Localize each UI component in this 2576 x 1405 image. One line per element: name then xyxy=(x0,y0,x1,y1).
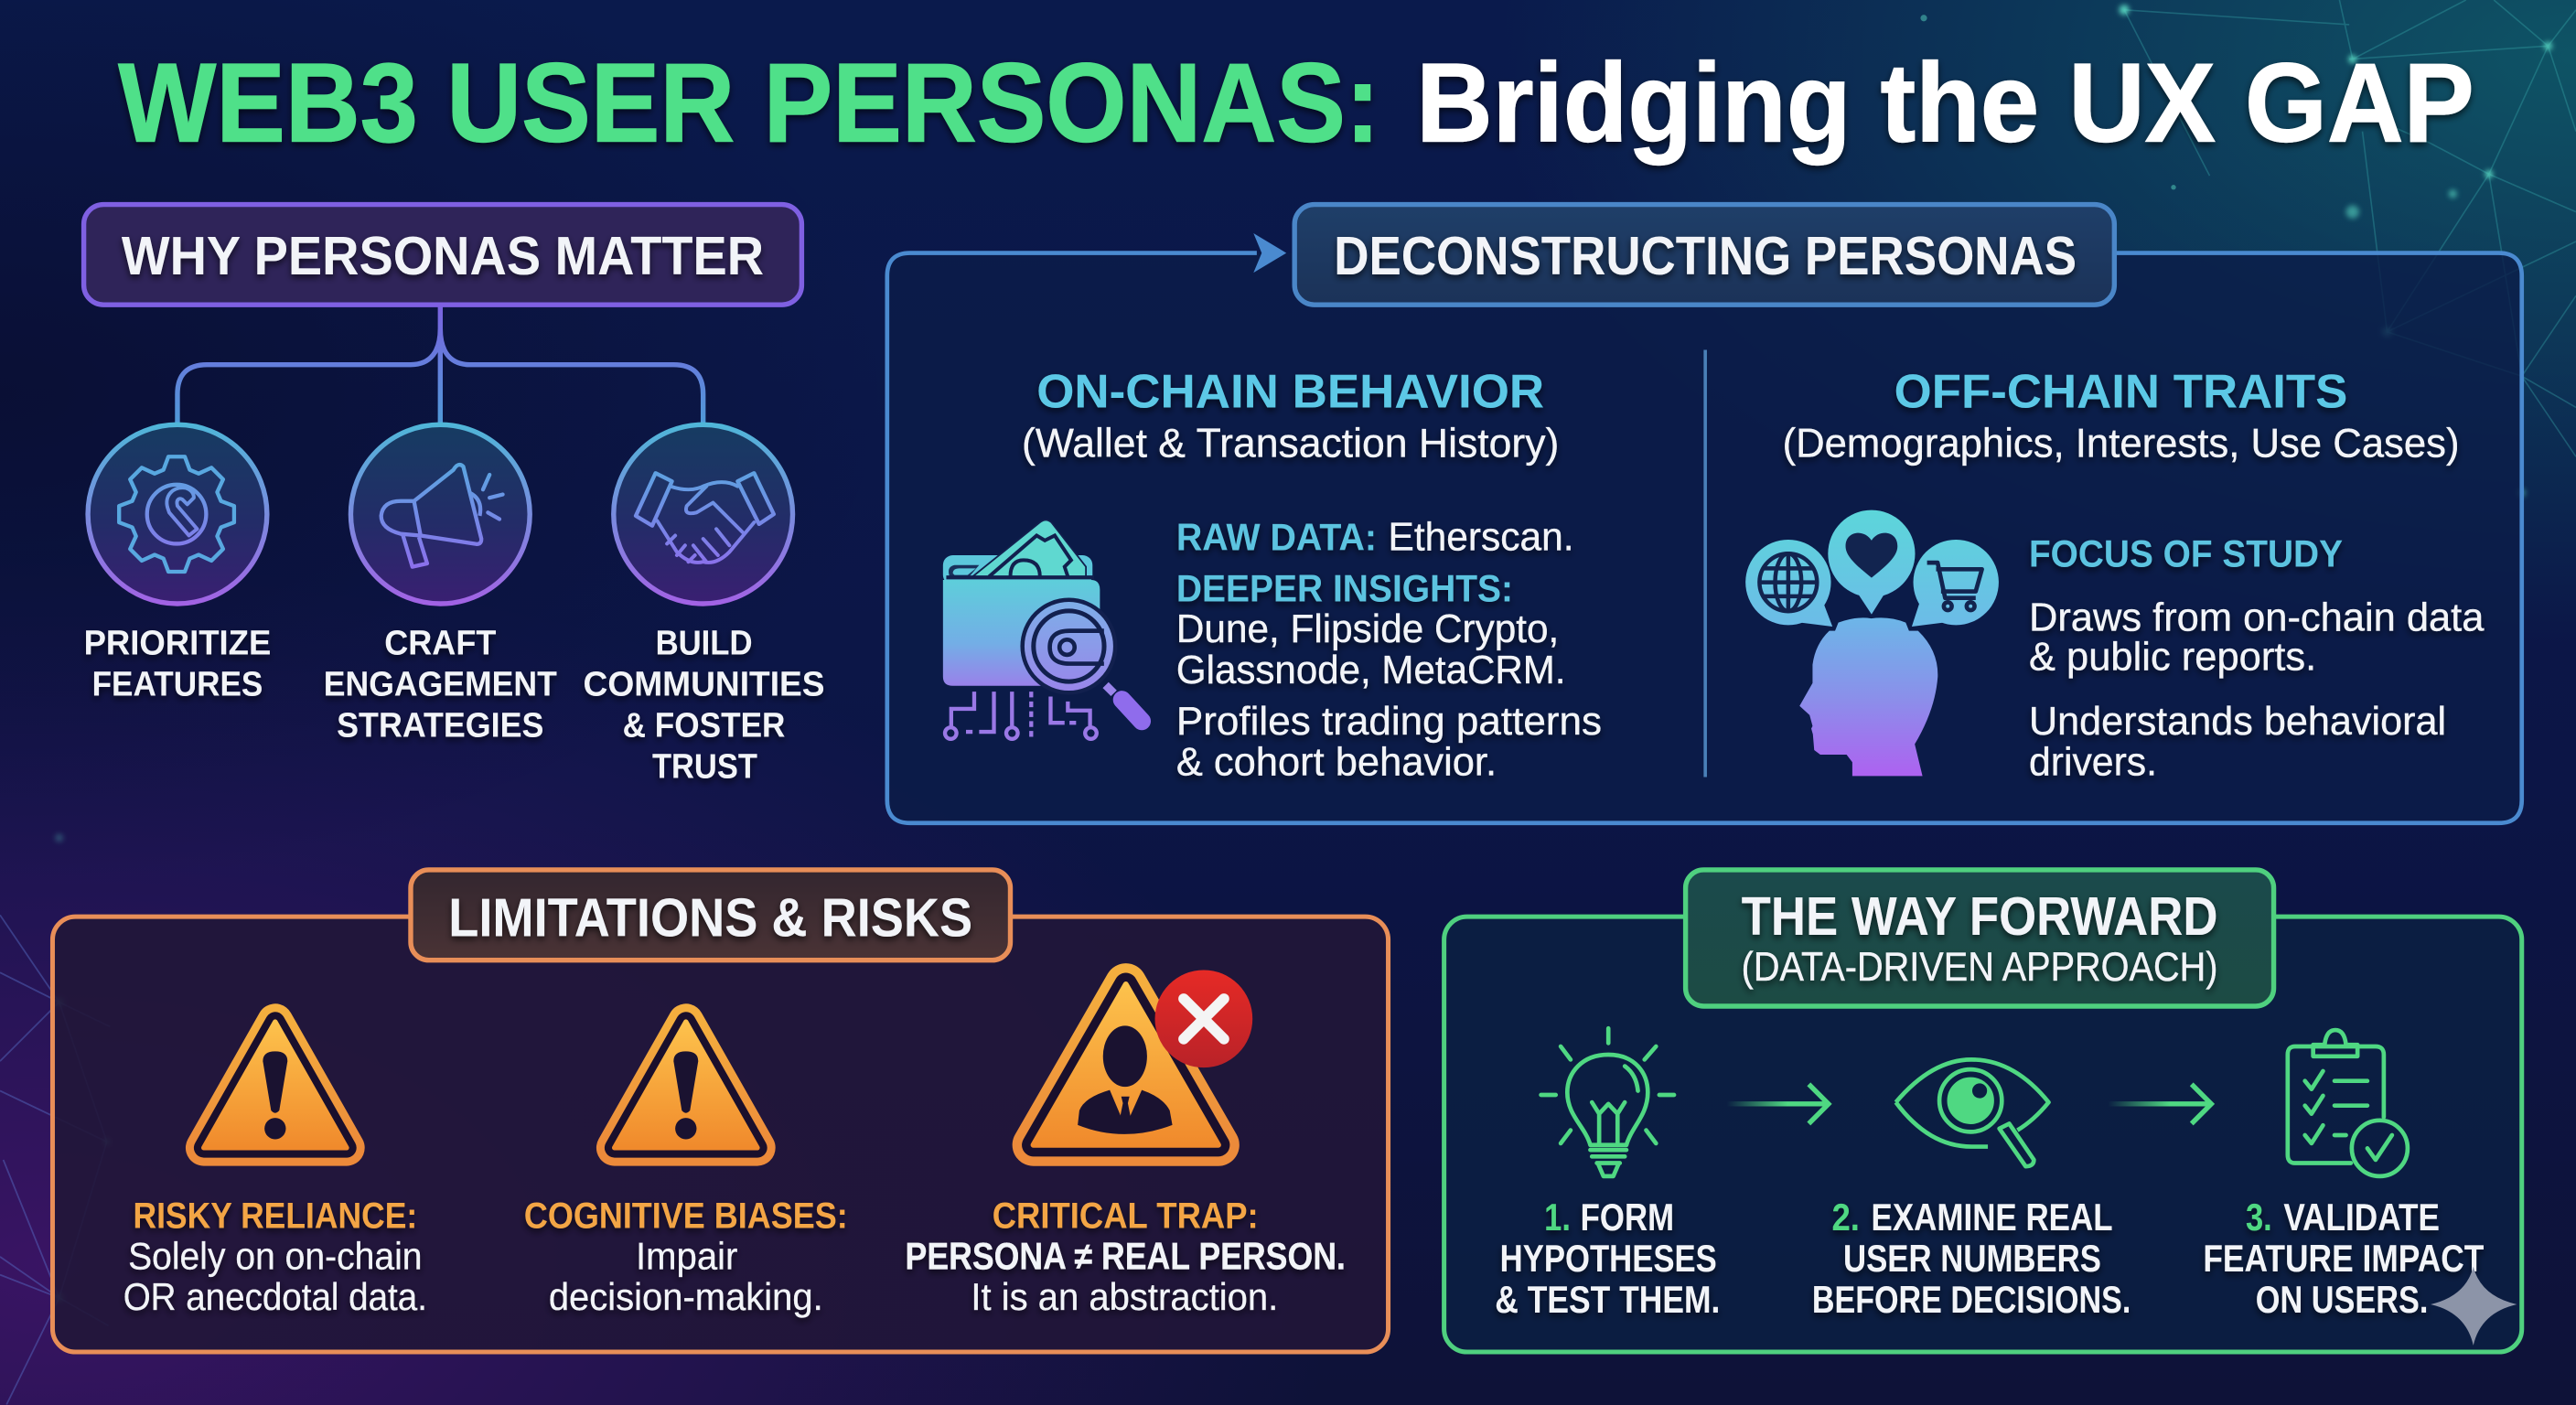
text: critical trap xyxy=(906,1196,1346,1318)
panel frame xyxy=(52,917,1389,1352)
heading: why personas matter xyxy=(84,205,801,305)
text: cognitive biases: Impair xyxy=(636,1235,738,1277)
text: raw data and deeper insights: Profiles trading patterns xyxy=(1176,700,1602,744)
panel frame xyxy=(1444,917,2522,1352)
label: craft engagement strategies xyxy=(324,624,557,744)
title: WEB3 USER PERSONAS: xyxy=(118,39,1380,165)
text: step 2: USER NUMBERS xyxy=(1843,1238,2101,1280)
label: craft engagement strategies: ENGAGEMENT xyxy=(324,665,557,703)
panel: deconstructing personas xyxy=(887,205,2522,823)
subheading: on-chain behavior: (Wallet & Transaction History) xyxy=(1022,419,1559,466)
subheading: off-chain traits: OFF-CHAIN TRAITS xyxy=(1894,365,2347,418)
label: build communities and foster trust: & FOSTER xyxy=(623,705,785,744)
heading: deconstructing personas: DECONSTRUCTING PERSONAS xyxy=(1334,225,2077,286)
heading: why personas matter: WHY PERSONAS MATTER xyxy=(122,225,764,286)
icon: warning triangle xyxy=(204,1022,347,1148)
text: raw data and deeper insights: Dune, Flipside Crypto, xyxy=(1176,607,1559,651)
icon: warning triangle with person and red cross xyxy=(1034,970,1252,1145)
text: step 1: HYPOTHESES xyxy=(1500,1238,1717,1280)
step 2: examine real numbers xyxy=(1812,1059,2131,1321)
heading: the way forward: (DATA-DRIVEN APPROACH) xyxy=(1742,943,2217,990)
arrow into heading xyxy=(1253,233,1286,273)
subheading: on-chain behavior: ON-CHAIN BEHAVIOR xyxy=(1036,365,1544,418)
item: cognitive biases xyxy=(524,1022,848,1318)
text: step 1: 1. xyxy=(1544,1196,1571,1239)
text: focus of study: Draws from on-chain data xyxy=(2029,596,2484,640)
step 3: validate feature impact xyxy=(2203,1030,2484,1321)
text: step 3: VALIDATE xyxy=(2283,1196,2440,1239)
text: cognitive biases: COGNITIVE BIASES: xyxy=(524,1196,848,1236)
label: craft engagement strategies: CRAFT xyxy=(384,624,496,662)
panel: why personas matter xyxy=(84,205,825,785)
text: raw data and deeper insights xyxy=(1176,516,1602,785)
icon: gear with wrench xyxy=(88,424,267,604)
label: prioritize features: PRIORITIZE xyxy=(84,624,271,662)
text: step 3: FEATURE IMPACT xyxy=(2203,1238,2484,1280)
icon: megaphone xyxy=(350,424,530,604)
text: focus of study: FOCUS OF STUDY xyxy=(2029,533,2343,575)
icon: eye with magnifier xyxy=(1895,1059,2049,1166)
panel: limitations and risks xyxy=(52,870,1389,1352)
icon: warning triangle xyxy=(615,1022,757,1148)
text: step 2: EXAMINE REAL xyxy=(1872,1196,2113,1239)
text: focus of study: & public reports. xyxy=(2029,636,2316,680)
item: critical trap xyxy=(906,970,1346,1318)
heading: deconstructing personas xyxy=(1294,205,2114,305)
text: raw data and deeper insights: Etherscan. xyxy=(1389,516,1573,560)
text: step 1 xyxy=(1495,1196,1720,1321)
icon: clipboard with check xyxy=(2288,1030,2408,1176)
subheading: off-chain traits: (Demographics, Interests, Use Cases) xyxy=(1783,419,2459,466)
text: focus of study: drivers. xyxy=(2029,741,2157,785)
item: risky reliance xyxy=(123,1022,427,1318)
text: focus of study: Understands behavioral xyxy=(2029,700,2446,744)
icon: wallet with magnifier xyxy=(943,520,1142,739)
text: step 3 xyxy=(2203,1196,2484,1321)
heading: the way forward xyxy=(1686,870,2274,1006)
connector lines xyxy=(177,306,703,424)
text: risky reliance: OR anecdotal data. xyxy=(123,1276,427,1318)
text: critical trap: It is an abstraction. xyxy=(971,1276,1278,1318)
text: step 2 xyxy=(1812,1196,2131,1321)
text: step 3: 3. xyxy=(2246,1196,2272,1239)
text: raw data and deeper insights: DEEPER INSIGHTS: xyxy=(1176,567,1513,609)
text: step 1: & TEST THEM. xyxy=(1495,1279,1720,1321)
text: focus of study xyxy=(2029,533,2484,785)
heading: limitations and risks: LIMITATIONS & RISKS xyxy=(448,887,972,949)
label: prioritize features xyxy=(84,624,271,703)
label: build communities and foster trust: COMMUNITIES xyxy=(584,665,825,703)
icon: handshake xyxy=(614,424,793,604)
text: step 1: FORM xyxy=(1581,1196,1674,1239)
label: build communities and foster trust: BUILD xyxy=(656,624,753,662)
text: risky reliance xyxy=(123,1196,427,1318)
text: step 2: 2. xyxy=(1831,1196,1860,1239)
text: cognitive biases xyxy=(524,1196,848,1318)
text: raw data and deeper insights: Glassnode, MetaCRM. xyxy=(1176,649,1566,692)
arrow: step 1 to 2 xyxy=(1727,1084,1829,1123)
icon: light bulb xyxy=(1541,1028,1674,1176)
panel frame xyxy=(887,253,2522,823)
label: craft engagement strategies: STRATEGIES xyxy=(337,705,543,744)
text: raw data and deeper insights: & cohort behavior. xyxy=(1176,741,1497,785)
text: risky reliance: Solely on on-chain xyxy=(128,1235,423,1277)
text: risky reliance: RISKY RELIANCE: xyxy=(133,1196,417,1236)
heading: limitations and risks xyxy=(411,870,1010,960)
panel: the way forward xyxy=(1444,870,2522,1352)
column: off-chain traits xyxy=(1745,365,2484,785)
column: on-chain behavior xyxy=(943,365,1602,785)
label: prioritize features: FEATURES xyxy=(92,665,263,703)
text: critical trap: PERSONA ≠ REAL PERSON. xyxy=(906,1235,1346,1277)
subheading: on-chain behavior xyxy=(1022,365,1559,466)
text: step 3: ON USERS. xyxy=(2256,1279,2428,1321)
text: critical trap: CRITICAL TRAP: xyxy=(993,1196,1259,1236)
arrow: step 2 to 3 xyxy=(2108,1084,2211,1123)
text: raw data and deeper insights: RAW DATA: xyxy=(1176,517,1377,559)
step 1: form hypotheses xyxy=(1495,1028,1720,1321)
label: build communities and foster trust xyxy=(584,624,825,785)
subheading: off-chain traits xyxy=(1783,365,2459,466)
icon: sparkle watermark xyxy=(2431,1267,2517,1346)
icon: head with interest bubbles xyxy=(1745,510,1999,776)
label: build communities and foster trust: TRUST xyxy=(652,746,757,785)
text: step 2: BEFORE DECISIONS. xyxy=(1812,1279,2131,1321)
text: cognitive biases: decision-making. xyxy=(549,1276,823,1318)
title: Bridging the UX GAP xyxy=(1416,39,2474,165)
title xyxy=(118,39,2474,165)
heading: the way forward: THE WAY FORWARD xyxy=(1742,885,2217,947)
